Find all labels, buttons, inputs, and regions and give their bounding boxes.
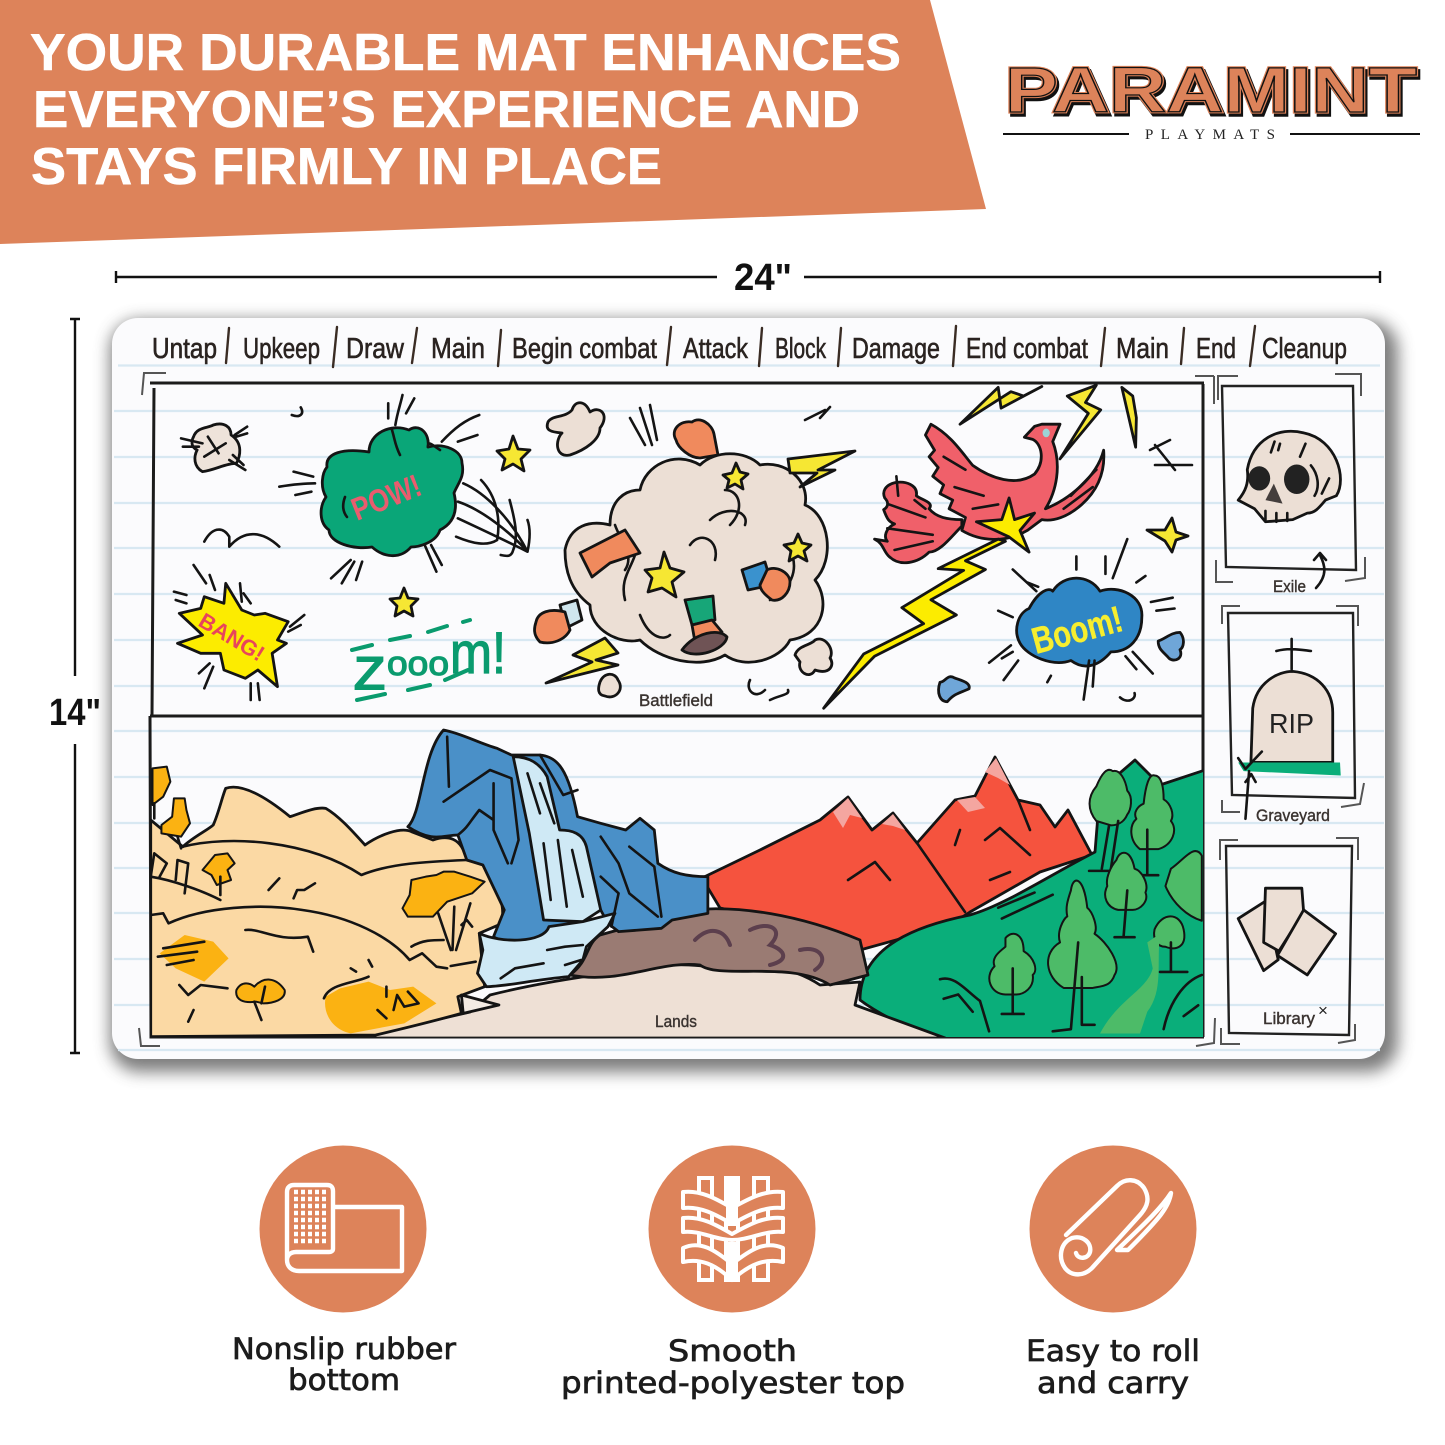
icon: rolled mat <box>1061 1180 1171 1274</box>
tan hills <box>151 767 503 1037</box>
heading banner: EVERYONE’S EXPERIENCE AND <box>33 81 860 139</box>
fight cloud <box>535 420 827 662</box>
cloud: POW: POW! <box>346 467 426 527</box>
feature: smooth printed-polyester top: Smooth <box>668 1334 797 1368</box>
sand path <box>375 963 945 1038</box>
phase track: End combat <box>966 333 1088 365</box>
feature: easy to roll and carry: and carry <box>1037 1366 1189 1400</box>
BANG burst <box>174 565 304 700</box>
logo: Paramint Playmats: PARAMINT <box>1007 57 1419 129</box>
brown river rocks <box>570 909 868 985</box>
phase track: Draw <box>346 333 405 365</box>
icon: card stack <box>1238 888 1336 975</box>
feature: easy to roll and carry: Easy to roll <box>1026 1334 1200 1368</box>
panel: graveyard <box>1238 639 1341 825</box>
lightning and phoenix <box>824 385 1136 708</box>
feature: smooth printed-polyester top <box>561 1146 905 1400</box>
puffs and lightning <box>546 403 1192 700</box>
icon: woven fabric <box>683 1178 783 1280</box>
feature: nonslip rubber bottom: Nonslip rubber <box>232 1332 456 1366</box>
label: RIP: RIP <box>1269 708 1314 739</box>
label: Battlefield: Battlefield <box>639 691 713 710</box>
cloud: POW <box>321 428 463 556</box>
phase track: Cleanup <box>1262 333 1347 365</box>
height dimension: 14 inches: 14" <box>49 692 101 734</box>
phase track: Attack <box>683 333 748 365</box>
logo: Paramint Playmats: PLAYMATS <box>1145 127 1275 143</box>
arrow: exile <box>1314 553 1326 588</box>
label: Library: Library <box>1263 1009 1315 1028</box>
Zooom text: m! <box>450 621 506 686</box>
Zooom text <box>352 620 506 701</box>
BANG burst: BANG! <box>194 608 269 666</box>
phase track: Upkeep <box>243 333 320 365</box>
heading banner: YOUR DURABLE MAT ENHANCES <box>30 24 901 82</box>
feature: smooth printed-polyester top: printed-polyester top <box>561 1366 905 1400</box>
phase track: Main <box>1116 333 1169 365</box>
phase track: Untap <box>152 333 217 365</box>
panel: battlefield art <box>174 385 1192 710</box>
green forest <box>860 760 1205 1040</box>
Zooom text: Z <box>353 648 386 701</box>
cloud: Boom: Boom! <box>1027 598 1127 662</box>
width dimension: 24 inches <box>116 257 1380 299</box>
feature: nonslip rubber bottom: bottom <box>288 1363 400 1397</box>
phase track: Begin combat <box>512 333 657 365</box>
feature: nonslip rubber bottom <box>232 1146 456 1397</box>
logo: Paramint Playmats: PARAMINT <box>1005 54 1417 126</box>
label: Exile: Exile <box>1273 577 1306 596</box>
logo: Paramint Playmats <box>1003 54 1420 143</box>
height dimension: 14 inches <box>49 319 101 1053</box>
small scribble cloud <box>181 395 530 583</box>
heading banner <box>0 0 986 244</box>
red mountains <box>702 757 1092 950</box>
phase track: Block <box>775 333 826 365</box>
icon: tombstone <box>1238 639 1341 819</box>
phase track: Damage <box>852 333 940 365</box>
mark: library x: × <box>1318 1001 1328 1020</box>
playmat <box>110 318 1398 1072</box>
Zooom text: ooo <box>387 645 449 683</box>
heading banner: STAYS FIRMLY IN PLACE <box>31 138 662 196</box>
logo: Paramint Playmats: PARAMINT <box>1005 54 1417 126</box>
phase track <box>152 326 1347 367</box>
panel: exile <box>1238 431 1340 596</box>
panel: library <box>1238 888 1336 1028</box>
icon: rubber backing <box>287 1185 402 1271</box>
zone frames <box>139 373 1365 1046</box>
phase track: End <box>1196 333 1236 365</box>
cloud: Boom <box>939 539 1183 702</box>
stars <box>390 436 1188 616</box>
sand path: Lands <box>655 1012 697 1031</box>
icon: skull <box>1238 431 1340 522</box>
panel: lands scene <box>151 730 1205 1040</box>
phase track: Main <box>431 333 485 365</box>
waterfall <box>408 730 708 987</box>
feature: easy to roll and carry <box>1026 1146 1200 1400</box>
label: Graveyard: Graveyard <box>1256 806 1330 825</box>
width dimension: 24 inches: 24" <box>734 257 792 299</box>
